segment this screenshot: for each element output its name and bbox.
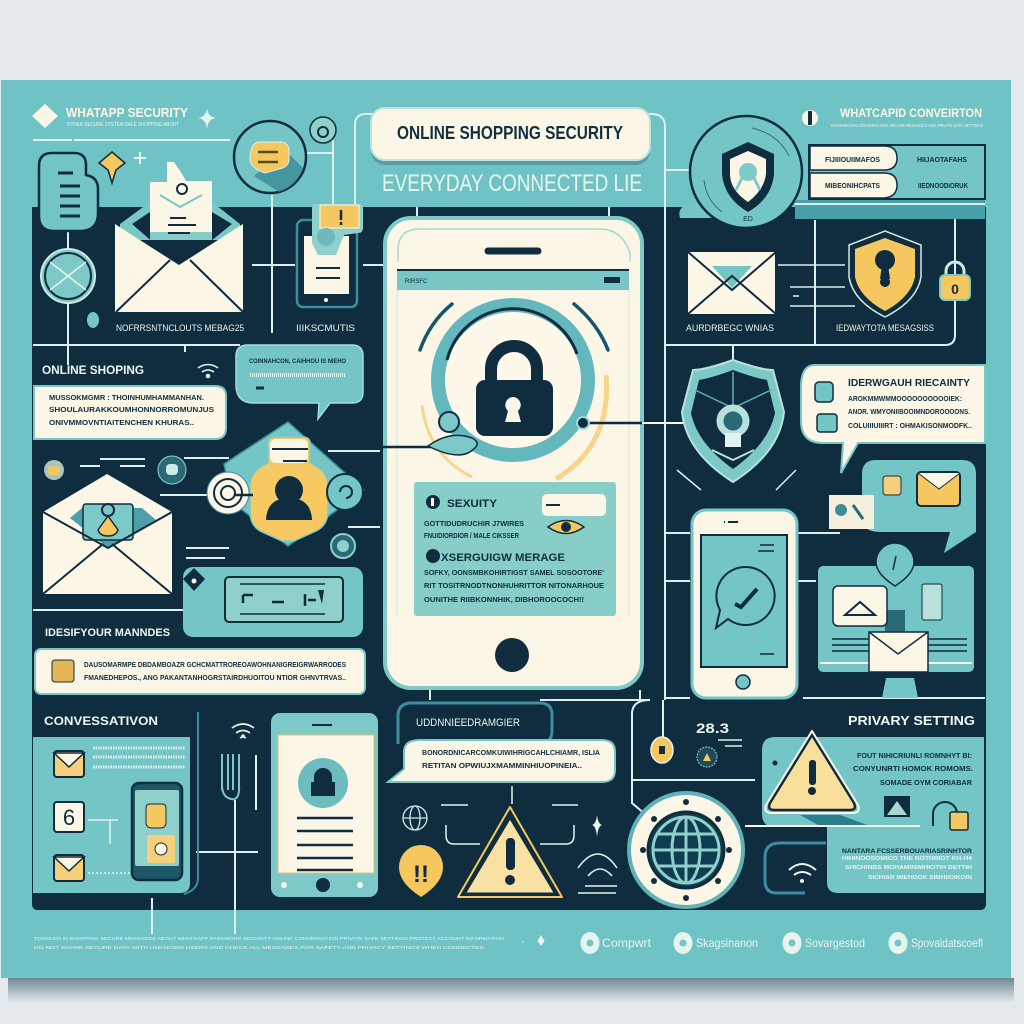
- panel: privacy warning: SOMADE OYM CORIABAR: [880, 778, 973, 787]
- connector: right node: [577, 417, 696, 429]
- security info panel: SOFKY, OONSMBKOHIRTIGST SAMEL SOSOOTORE': [424, 570, 604, 577]
- icon: wifi: [198, 364, 218, 378]
- icon: open envelope: [43, 474, 172, 594]
- callout: connection note: COINNAHCON, CAIHHOU IS NIEHO: [249, 358, 346, 365]
- heading: conversation: CONVESSATIVON: [44, 714, 158, 728]
- panel: top right tabs: IIEDNOODIORUK: [918, 183, 968, 190]
- callout: identity security: IDERWGAUH RIECAINTY: [848, 377, 970, 389]
- top-left heading: WHATAPP SECURITY: [66, 106, 189, 120]
- top-right heading: WHATCAPID CONVEIRTON: [840, 106, 982, 120]
- callout: connection note: [236, 345, 363, 419]
- icons: version badges: [651, 737, 742, 767]
- label: right envelope caption: AURDRBEGC WNIAS: [686, 323, 774, 333]
- top-right heading: [802, 106, 983, 128]
- footer badges: Compwrt: [602, 936, 652, 950]
- callout: manners text: [35, 649, 365, 694]
- connector lines: [33, 114, 985, 934]
- top-left heading: OTHER SECURE SYSTEM SAFE SHOPPING ABOUT: [67, 122, 179, 128]
- panel: privacy warning: FOUT NIHICRIUNLI ROMNHYT BI:: [857, 751, 972, 760]
- icon: yellow alert pin: [399, 845, 443, 897]
- panel: top right tabs: [795, 145, 985, 219]
- subtitle: EVERYDAY CONNECTED LIE: [382, 170, 642, 197]
- icon: fork: [222, 754, 239, 799]
- label: phone caption: IIIKSCMUTIS: [296, 323, 355, 333]
- icon: shield circle: [679, 116, 802, 228]
- icon: circular envelope: [41, 249, 95, 303]
- callout: danger bubble: RETITAN OPWIUJXMAMMINHIUOPINEIA..: [422, 761, 582, 770]
- footer text: [34, 936, 544, 950]
- connector: left node: [380, 412, 477, 455]
- icon: chat bubble card: [39, 153, 98, 231]
- icon: user lock diamond: [207, 422, 364, 558]
- security info panel: [414, 482, 616, 616]
- label: shield caption: IEDWAYTOTA MESAGSISS: [836, 323, 934, 333]
- icon: phone check: [692, 510, 797, 698]
- callout: shopping text: MUSSOKMGMR : THOINHUMHAMMANHAN.: [49, 395, 204, 402]
- icon: dark shield: [677, 360, 796, 490]
- label: version number: 28.3: [696, 720, 729, 736]
- panel: privacy notes: SHICHINBS MOHAMINIMHIOTIH DETTIH: [845, 865, 973, 871]
- top-left heading: [32, 104, 230, 164]
- panel: top right tabs: MIBEONIHCPATS: [825, 183, 880, 190]
- footer badges: Sovargestod: [805, 936, 865, 950]
- title banner: online shopping security: [371, 108, 650, 165]
- callout: identity security: COLUIIIUIIIRT : OHMAKISONMODFK..: [848, 423, 972, 430]
- icon: star badge: [99, 152, 125, 183]
- icon: globe small: [403, 806, 427, 830]
- icon: yellow alert pin: !!: [413, 861, 429, 888]
- panel: privacy notes: SICHIAR IMEHOOK SIMHIIOIKOIN: [868, 875, 973, 881]
- icon: monitor with mail: [817, 543, 975, 698]
- icon: big warning: [441, 786, 602, 897]
- security info panel: XSERGUIGW MERAGE: [441, 552, 565, 564]
- main phone: [385, 218, 642, 688]
- callout: shopping text: SHOULAURAKKOUMHONNORROMUNJUS: [49, 407, 214, 414]
- label: update danger tab: UDDNNIEEDRAMGIER: [416, 717, 520, 729]
- panel: privacy warning: CONYUNRTI HOMOK ROMOMS.: [853, 764, 973, 773]
- footer badges: [580, 932, 983, 954]
- panel: privacy notes: [762, 737, 984, 893]
- top-right heading: INFORMATION CONVERSATION SECURE MESSAGES AND PRIVATE DATA SETTINGS: [831, 123, 983, 128]
- dark main panel: [32, 207, 986, 910]
- label: envelope caption: NOFRRSNTNCLOUTS MEBAG25: [116, 323, 244, 333]
- icon: phone with lock: [271, 713, 378, 897]
- circular lock emblem: [420, 304, 608, 479]
- panel: top right tabs: FIJIIIOUIIMAFOS: [825, 157, 880, 164]
- icon: small teal lock: [87, 312, 99, 328]
- footer badges: Skagsinanon: [696, 936, 758, 950]
- icon: envelope with letter: [115, 162, 243, 312]
- panel: conversation: 6: [63, 805, 75, 830]
- callout: shopping text: ONIVMMOVNTIAITENCHEN KHURAS..: [49, 420, 194, 427]
- icon: globe badge: [629, 793, 743, 907]
- title banner: online shopping security: ONLINE SHOPPING SECURITY: [397, 122, 624, 143]
- icon: small seal: [310, 117, 336, 143]
- icon: shield circle: ED: [743, 216, 753, 223]
- panel: privacy warning: [765, 731, 973, 830]
- callout: identity security: ANOR. WMYONIIBOOIMNDOROOOONS.: [848, 409, 970, 416]
- icon: yellow padlock: [940, 262, 970, 300]
- callout: danger bubble: [388, 740, 615, 782]
- security info panel: FNUIDIORDIOR / MALE CIKSSER: [424, 531, 519, 540]
- panel: slider control: [183, 567, 363, 637]
- panel: privacy notes: NANTARA FCSSERBOUARIASRINHTOR: [842, 848, 972, 855]
- heading: privacy setting: PRIVARY SETTING: [848, 714, 975, 728]
- home button: [495, 638, 529, 672]
- panel: small message icons: [829, 460, 976, 553]
- panel: conversation: [33, 712, 198, 894]
- security info panel: RIT TOSITRNODTNONHUHRITTOR NITONARHOUE: [424, 583, 604, 590]
- icons: small badges: [44, 456, 186, 484]
- security info panel: GOTTIDUDRUCHIR J7WIRES: [424, 519, 524, 528]
- heading: online shopping: ONLINE SHOPING: [42, 365, 144, 377]
- callout: manners text: FMANEDHEPOS., ANG PAKANTANHOGRSTAIRDHUOITOU NTIOR GHNVTRVAS..: [84, 675, 346, 682]
- icon: yellow shield keyhole: [849, 231, 921, 317]
- panel: privacy notes: HIHINOOSOMICO THE ROTHRIOT KH-H4: [842, 856, 972, 862]
- footer text: DO NOT SHARE SECURE DATA WITH UNKNOWN USERS AND CHECK ALL MESSAGES FOR SAFETY AND PRIVACY SETTINGS WHEN CONNECTED: [34, 945, 485, 950]
- callout: shopping text: [34, 386, 226, 439]
- line: privacy divider: [745, 825, 920, 827]
- main phone: RIRSFC: [405, 279, 428, 285]
- label: update danger tab: [398, 703, 552, 744]
- icon: yellow padlock: 0: [951, 281, 959, 297]
- panel: top right tabs: HIIJAOTAFAHS: [917, 157, 967, 164]
- callout: danger bubble: BONORDNICARCOMKUIWIHRIGCAHLCHIAMR, ISLIA: [422, 748, 601, 757]
- footer text: TOGGLED IN SHOPPING SECURE MESSAGES ABOUT WHATSAPP PASSWORD SECURITY ONLINE CONVERSATION PRIVATE SAFE SETTINGS PROTECT ACCOUNT INFORMATION: [34, 936, 504, 941]
- security info panel: OUNITHE RIIBKONNHIK, DIBHOROOCOCH!!: [424, 597, 584, 604]
- callout: manners text: DAUSOMARMPE DBDAMBOAZR GCHCMATTROREOAWOHNANIGREIGRWARRODES: [84, 662, 346, 669]
- callout: identity security: AROKMMWMMOOOOOOOOOOIEK:: [848, 396, 962, 403]
- footer badges: Spovaldatscoefl: [911, 936, 983, 950]
- icon: phone with warning: [297, 204, 363, 307]
- icon: wifi small: [232, 724, 254, 738]
- icon: speech circle: [234, 121, 306, 193]
- heading: identify your mandes: IDESIFYOUR MANNDES: [45, 627, 170, 639]
- callout: identity security: [801, 365, 985, 473]
- security info panel: SEXUITY: [447, 498, 498, 510]
- icon: right envelope: [688, 252, 855, 314]
- icon: wifi rounded tab: [765, 843, 826, 893]
- icon: wifi dome: [578, 854, 617, 893]
